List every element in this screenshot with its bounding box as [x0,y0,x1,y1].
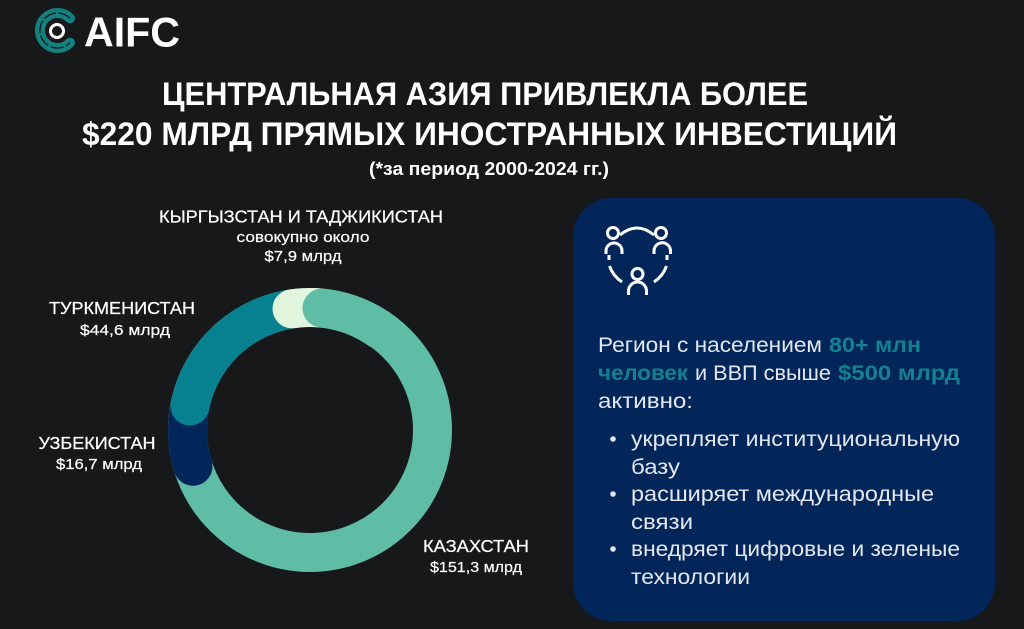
icon: logo ring [40,13,70,48]
bullet: institutional base: базу [631,456,681,479]
bullet: digital and green technology: технологии [631,566,750,589]
bullet: institutional base: укрепляет институциональную [631,428,960,451]
panel: region summary [573,198,995,621]
intro text: и ВВП свыше [695,362,831,385]
intro text: Регион с населением [598,334,822,357]
segment: Kyrgyzstan and Tajikistan [292,307,322,309]
title [82,76,897,152]
bullet: digital and green technology [610,538,960,589]
segment: Kazakhstan base ring [188,308,432,552]
label: Kyrgyzstan and Tajikistan: совокупно около [236,229,370,246]
label: Turkmenistan [49,298,195,339]
title: $220 МЛРД ПРЯМЫХ ИНОСТРАННЫХ ИНВЕСТИЦИЙ [82,116,897,152]
logo wordmark: AIFC [84,8,180,56]
segment: Kazakhstan start cap [322,308,380,330]
bullet: institutional base [610,428,960,479]
icon: people in circle [606,228,670,295]
intro text [598,334,960,413]
bullet: international ties: связи [631,511,693,534]
bullet: international ties: расширяет международные [631,483,934,506]
label: Turkmenistan: ТУРКМЕНИСТАН [49,298,195,318]
subtitle: (*за период 2000-2024 гг.) [369,159,609,179]
bullet: international ties [610,483,934,534]
label: Uzbekistan: $16,7 млрд [56,456,142,473]
label: Kazakhstan: $151,3 млрд [430,559,522,576]
label: Kazakhstan: КАЗАХСТАН [423,536,529,556]
bullet: digital and green technology: внедряет цифровые и зеленые [631,538,960,561]
intro text: 80+ млн [829,334,921,357]
label: Kazakhstan [423,536,529,576]
segment: Uzbekistan [188,406,193,466]
label: Kyrgyzstan and Tajikistan: КЫРГЫЗСТАН И ТАДЖИКИСТАН [159,206,443,226]
segment: Turkmenistan [190,309,292,406]
label: Kyrgyzstan and Tajikistan: $7,9 млрд [264,248,342,265]
label: Turkmenistan: $44,6 млрд [80,322,170,339]
title: ЦЕНТРАЛЬНАЯ АЗИЯ ПРИВЛЕКЛА БОЛЕЕ [162,76,808,112]
logo: AIFC [40,8,180,56]
donut chart [188,307,432,552]
intro text: человек [598,362,689,385]
label: Uzbekistan [38,433,156,473]
intro text: $500 млрд [838,362,960,385]
intro text: активно: [598,390,693,413]
label: Kyrgyzstan and Tajikistan [159,206,443,265]
label: Uzbekistan: УЗБЕКИСТАН [38,433,156,453]
